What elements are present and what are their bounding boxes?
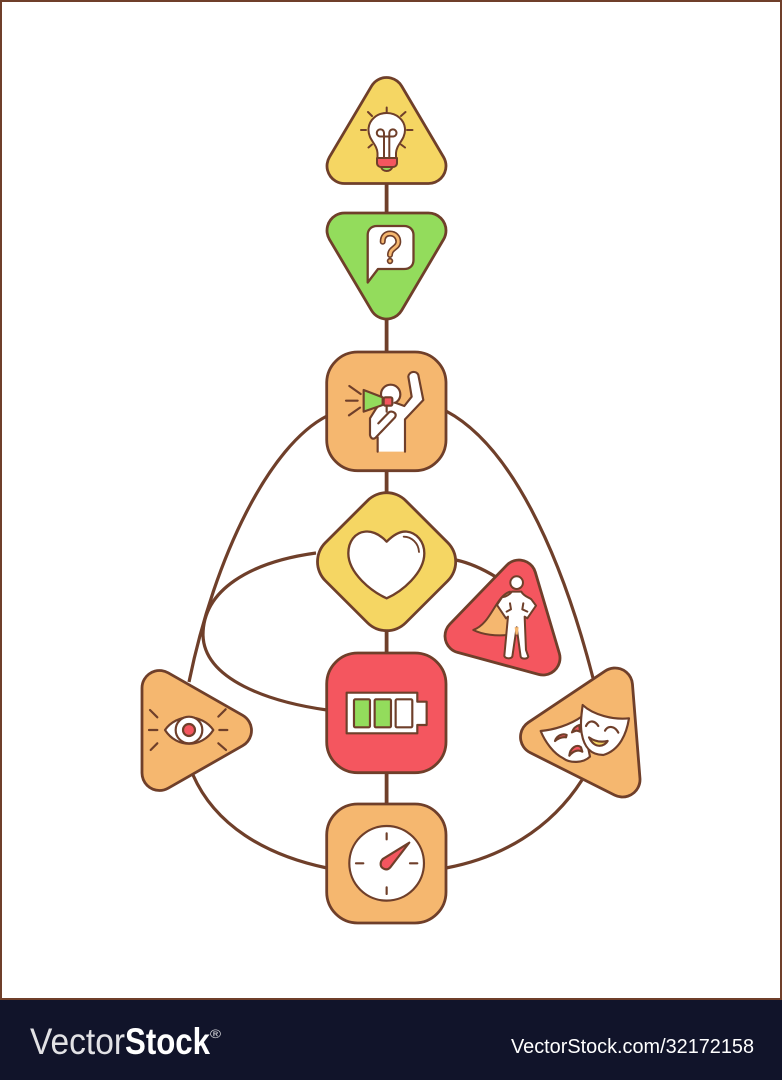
icon: person with megaphone (346, 372, 423, 452)
connecting lines (189, 184, 593, 868)
icon: heart (348, 532, 424, 598)
node: megaphone person square (327, 352, 446, 471)
icon: light bulb (361, 108, 412, 171)
icon: caped hero (473, 576, 536, 659)
node: battery square (327, 653, 446, 773)
icon: battery (347, 693, 427, 733)
node: gauge square (327, 804, 446, 923)
brand logo text (30, 1021, 221, 1062)
icon: eye (149, 709, 227, 750)
icon: question speech bubble (368, 226, 414, 282)
icon: gauge dial (349, 826, 424, 901)
node: light bulb triangle (344, 95, 428, 171)
node: caped hero triangle (462, 576, 543, 659)
node: heart diamond (344, 520, 429, 604)
node: theatre masks triangle (538, 686, 629, 780)
brand logo text: Stock (125, 1021, 210, 1062)
brand logo text: ® (210, 1027, 221, 1041)
footer bar (0, 1000, 782, 1080)
image id text: VectorStock.com/32172158 (511, 1036, 754, 1058)
node: eye triangle (149, 688, 234, 773)
brand logo text: Vector (30, 1021, 125, 1062)
node: question triangle (344, 226, 428, 302)
icon: theatre masks (541, 705, 629, 762)
